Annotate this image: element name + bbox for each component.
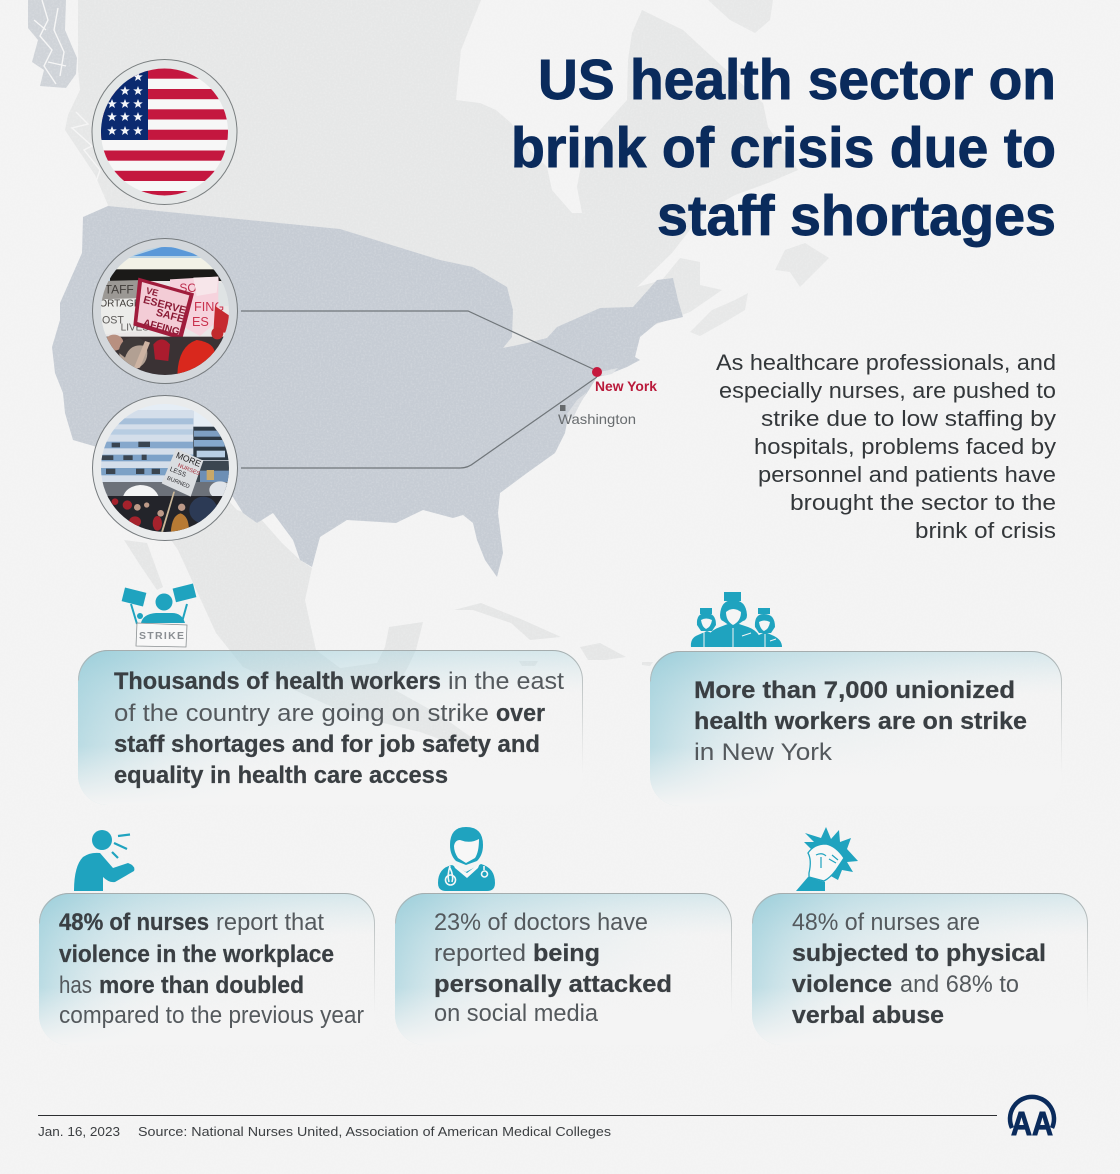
panel: thousands of workers on strike	[78, 650, 583, 805]
panel: workplace violence	[39, 893, 375, 1045]
photo: nurses protesting with signs: LIVES	[121, 323, 149, 334]
photo: nurses protesting with signs: VE	[145, 286, 159, 298]
panel: physical and verbal abuse	[752, 893, 1088, 1045]
icon: strike protester	[122, 584, 196, 647]
map: Canada	[65, 0, 798, 400]
text: doctors statement: on social media	[434, 1000, 599, 1027]
photo: nurses protesting with signs	[90, 236, 240, 386]
footer rule	[38, 1114, 997, 1116]
panel: doctors attacked online	[395, 893, 732, 1045]
intro paragraph: strike due to low staffing by	[761, 406, 1056, 431]
text: strike statement: Thousands of health workers	[114, 668, 441, 695]
icon: raised fist with burst	[796, 827, 858, 891]
marker: New York	[592, 367, 657, 394]
photo: nurses protesting with signs: FING	[194, 300, 224, 314]
intro paragraph: personnel and patients have	[758, 462, 1056, 487]
text: New York strike statement: More than 7,000 unionized	[694, 677, 1015, 704]
map: Mexico and Central America	[124, 500, 482, 750]
intro paragraph: As healthcare professionals, and	[716, 350, 1056, 375]
title	[511, 48, 1056, 248]
photo: nurses protesting with signs: ES	[192, 315, 209, 329]
title: US health sector on	[538, 48, 1056, 112]
photo: nurses protesting with signs: SOFE	[179, 281, 212, 295]
text: abuse statement: and 68% to	[900, 971, 1019, 998]
intro paragraph: especially nurses, are pushed to	[719, 378, 1056, 403]
text: workplace violence statement: report that	[216, 909, 324, 936]
text: New York strike statement: in New York	[694, 739, 833, 766]
icon: group of nurses	[691, 592, 782, 647]
text: workplace violence statement: compared to the previous year	[59, 1002, 364, 1029]
text: strike statement: staff shortages and for job safety and	[114, 731, 540, 758]
text: New York strike statement: health workers are on strike	[694, 708, 1027, 735]
title: staff shortages	[657, 184, 1056, 248]
map of North America	[28, 0, 829, 750]
text: strike statement: in the east	[448, 668, 564, 695]
photo: hospital building and crowd	[92, 396, 238, 540]
date: Jan. 16, 2023	[38, 1125, 120, 1139]
text: New York strike statement	[694, 677, 1027, 766]
text: doctors statement	[434, 909, 672, 1027]
text: strike statement: over	[496, 700, 545, 727]
photo: hospital building and crowd: MORE	[175, 450, 203, 469]
text: abuse statement: 48% of nurses are	[792, 909, 980, 936]
marker: Washington	[558, 405, 636, 427]
text: abuse statement: subjected to physical	[792, 940, 1046, 967]
text: doctors statement: being	[533, 940, 600, 967]
photo: nurses protesting with signs: ORTAGE	[99, 299, 141, 310]
title: brink of crisis due to	[511, 116, 1056, 180]
photo: nurses protesting with signs: SAFE	[155, 307, 185, 326]
photo: hospital building and crowd: BURNED	[166, 476, 190, 490]
map: Caribbean islands	[454, 603, 653, 666]
connector line: photo 1 to New York	[241, 311, 593, 369]
map: Canadian islands	[690, 0, 829, 336]
photo: hospital building and crowd: LESS	[169, 466, 188, 479]
text: strike statement: equality in health care access	[114, 762, 448, 789]
marker: Washington: Washington	[558, 411, 636, 427]
photo: nurses protesting with signs: ESERVE	[142, 294, 187, 317]
icon: US flag badge	[92, 60, 237, 204]
text: doctors statement: 23% of doctors have	[434, 909, 648, 936]
text: workplace violence statement: more than doubled	[99, 972, 304, 999]
source: Source: National Nurses United, Association of American Medical Colleges	[138, 1125, 611, 1139]
marker: New York: New York	[595, 378, 657, 394]
text: doctors statement: personally attacked	[434, 971, 672, 998]
text: workplace violence statement: 48% of nurses	[59, 909, 209, 936]
icon: shouting person	[74, 830, 134, 891]
text: abuse statement: verbal abuse	[792, 1002, 944, 1029]
intro paragraph	[716, 350, 1056, 543]
photo: nurses protesting with signs: OST	[102, 314, 124, 326]
text: abuse statement	[792, 909, 1046, 1029]
icon: doctor with stethoscope	[438, 827, 495, 891]
photo: nurses protesting with signs: TAFF	[105, 282, 134, 296]
intro paragraph: brought the sector to the	[790, 490, 1056, 515]
map: United States	[52, 206, 683, 577]
text: doctors statement: reported	[434, 940, 526, 967]
text: workplace violence statement	[59, 909, 364, 1029]
photo: hospital building and crowd: NURSES	[177, 463, 201, 477]
text: strike statement	[114, 668, 564, 789]
map: Alaska panhandle	[28, 0, 77, 88]
intro paragraph: hospitals, problems faced by	[754, 434, 1056, 459]
photo: nurses protesting with signs: AFFING	[142, 318, 181, 338]
text: abuse statement: violence	[792, 971, 892, 998]
logo: Anadolu Agency: AA	[1011, 1105, 1053, 1142]
panel: 7,000 unionized workers	[650, 651, 1062, 806]
text: workplace violence statement: has	[59, 972, 92, 999]
text: strike statement: of the country are going on strike	[114, 700, 489, 727]
intro paragraph: brink of crisis	[915, 518, 1056, 543]
icon: strike protester: STRIKE	[139, 630, 184, 642]
connector line: photo 2 to New York	[241, 377, 597, 468]
text: workplace violence statement: violence in the workplace	[59, 941, 334, 968]
